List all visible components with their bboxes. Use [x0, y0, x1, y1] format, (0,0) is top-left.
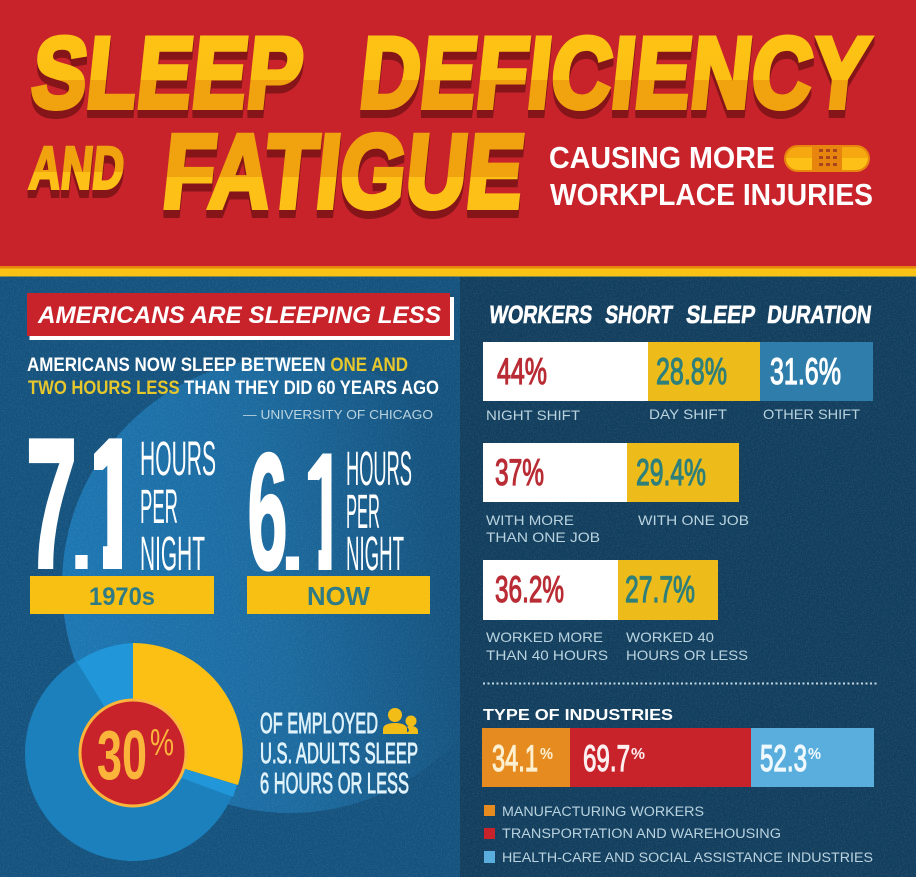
heading: workers short sleep duration: WORKERS [488, 301, 594, 329]
bar chart: industries: 69.7 [583, 738, 630, 779]
bar chart: hours worked: THAN 40 HOURS [486, 647, 608, 663]
title: and fatigue [27, 114, 530, 230]
bar chart: hours worked: 36.2% [495, 569, 564, 610]
stat: 6.1 hours: . [281, 420, 304, 604]
stat: 7.1 hours [28, 438, 216, 570]
heading: type of industries: TYPE OF INDUSTRIES [483, 707, 673, 724]
bar chart: shift: DAY SHIFT [649, 406, 727, 422]
label: now [247, 576, 430, 614]
bar chart: shift: 31.6% [770, 351, 841, 392]
bar chart: shift [483, 342, 873, 423]
bar chart: industries: 34.1 [492, 738, 538, 779]
bar chart: hours worked: WORKED MORE [486, 629, 603, 645]
title: sleep deficiency [27, 17, 875, 129]
heading: workers short sleep duration: SHORT [604, 301, 675, 329]
legend: MANUFACTURING WORKERS [502, 804, 704, 819]
background: right dark panel [460, 277, 916, 877]
bar chart: hours worked: 27.7% [625, 569, 695, 610]
legend [484, 804, 873, 865]
title: and fatigue: AND [27, 135, 128, 201]
subtitle [549, 140, 873, 212]
heading: workers short sleep duration: SLEEP [685, 301, 757, 329]
section banner: americans are sleeping less [27, 293, 454, 340]
heading: workers short sleep duration: DURATION [766, 301, 873, 329]
bar chart: shift: OTHER SHIFT [763, 406, 860, 422]
bar chart: jobs: THAN ONE JOB [486, 529, 600, 545]
stat: 6.1 hours: 6 [248, 420, 288, 604]
bar chart: industries: % [540, 746, 553, 763]
text: NIGHT [346, 528, 404, 581]
label: now: NOW [307, 581, 370, 611]
subtitle: WORKPLACE INJURIES [550, 177, 873, 212]
title: and fatigue: FATIGUE [158, 114, 530, 230]
label: 1970s: 1970s [89, 583, 155, 611]
stat: 7.1 hours: PER [140, 481, 178, 534]
legend: HEALTH-CARE AND SOCIAL ASSISTANCE INDUSTRIES [502, 850, 873, 865]
bar chart: jobs: 29.4% [636, 452, 706, 493]
label: 1970s [30, 576, 214, 614]
bar chart: industries: % [808, 746, 821, 763]
icon: bandage [784, 145, 870, 172]
heading: workers short sleep duration [488, 301, 873, 329]
speckle texture [0, 277, 916, 877]
bar chart: shift: 28.8% [656, 351, 727, 392]
bar chart: hours worked: WORKED 40 [626, 629, 714, 645]
subtitle: CAUSING MORE [549, 140, 775, 175]
stat: 7.1 hours: . [71, 400, 92, 606]
center badge: % [150, 722, 174, 764]
stat: 7.1 hours: 1 [82, 400, 146, 606]
text block: employed adults: 6 HOURS OR LESS [260, 768, 409, 800]
text block: employed adults: OF EMPLOYED [260, 708, 378, 740]
bar chart: jobs: 37% [495, 452, 544, 493]
stat: 6.1 hours [249, 451, 412, 572]
stat: 7.1 hours: 7 [26, 400, 77, 606]
moon [62, 357, 518, 813]
text block: employed adults [260, 708, 418, 800]
background: left blue panel [0, 277, 460, 877]
text block: intro: — UNIVERSITY OF CHICAGO [243, 407, 433, 422]
text block: intro: AMERICANS NOW SLEEP BETWEEN ONE AND [27, 355, 408, 376]
text block: intro [27, 355, 439, 422]
text: HOURS [140, 433, 216, 486]
bar chart: hours worked: HOURS OR LESS [626, 647, 748, 663]
bar chart: hours worked [483, 560, 748, 663]
text block: intro: TWO HOURS LESS THAN THEY DID 60 YEARS AGO [28, 378, 439, 399]
bar chart: industries [482, 728, 874, 787]
stat: 6.1 hours: 1 [303, 420, 349, 604]
bar chart: industries: % [631, 746, 645, 763]
text block: employed adults: U.S. ADULTS SLEEP [260, 738, 418, 770]
bar chart: jobs: WITH MORE [486, 512, 574, 528]
center badge [80, 700, 186, 806]
pie chart: 30 percent [25, 643, 243, 861]
bar chart: industries: 52.3 [760, 738, 807, 779]
header panel [0, 0, 916, 276]
title: sleep deficiency: SLEEP [27, 17, 309, 129]
icon: people [383, 708, 418, 734]
legend: TRANSPORTATION AND WAREHOUSING [502, 826, 781, 841]
text: HOURS [346, 443, 412, 496]
bar chart: jobs [483, 443, 749, 545]
bar chart: shift: NIGHT SHIFT [486, 407, 580, 423]
stat: 7.1 hours: NIGHT [140, 528, 205, 581]
section banner: americans are sleeping less: AMERICANS ARE SLEEPING LESS [37, 302, 441, 329]
bar chart: shift: 44% [497, 351, 547, 392]
stat: 6.1 hours: PER [346, 486, 380, 539]
bar chart: jobs: WITH ONE JOB [638, 512, 749, 528]
center badge: 30 [97, 716, 147, 794]
